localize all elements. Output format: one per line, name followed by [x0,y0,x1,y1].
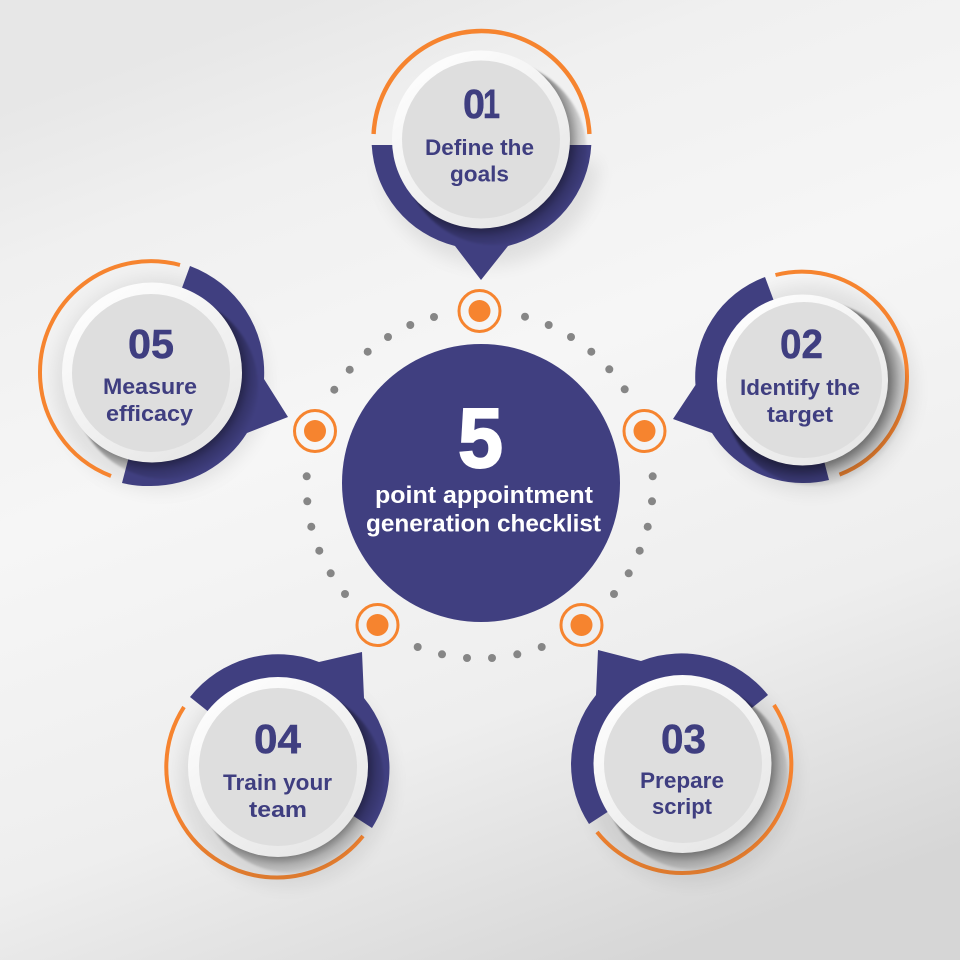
label [223,770,332,822]
label: team [249,797,307,822]
soft shadow [74,295,258,479]
navy pointer [571,650,768,824]
number: 02 [780,321,823,367]
dotted ring [303,313,657,662]
label [103,374,197,426]
number: 0 [463,81,485,127]
number: 1 [483,81,500,127]
label: Measure [103,374,197,399]
centre title [366,482,601,538]
inner grey circle [199,688,357,846]
label: Define the [425,135,534,160]
label [425,135,534,186]
soft shadow [200,689,384,873]
navy pointer [673,277,829,483]
number: 04 [254,716,301,762]
orange arc [374,31,589,134]
outer soft shadow [380,162,599,265]
label: Train your [223,770,332,795]
outer soft shadow [180,673,392,885]
node 01: define the goals [372,31,599,280]
label: goals [450,162,509,186]
centre number: 5 [458,391,503,485]
number [463,81,500,127]
marker 04 [357,604,398,646]
centre circle [342,344,620,622]
label: efficacy [106,401,193,426]
label: script [652,794,712,819]
marker 03 [561,604,602,646]
soft shadow [604,686,788,870]
orange arc [166,707,363,878]
centre title: generation checklist [366,510,601,538]
soft shadow [403,61,587,245]
node 04: train your team [166,652,392,885]
marker 01 [459,290,500,332]
marker 02 [624,410,665,452]
node 03: prepare script [571,650,796,882]
navy pointer [122,266,288,486]
label: target [767,402,834,427]
label [740,375,860,427]
label: Prepare [640,768,724,793]
node 02: identify the target [673,272,914,492]
outer soft shadow [584,670,796,882]
navy pointer [372,145,591,280]
number: 05 [128,321,174,367]
orange arc [597,705,791,873]
node 05: measure efficacy [40,261,288,490]
inner grey circle [604,685,762,843]
inner grey circle [726,302,882,458]
disc [392,50,570,228]
navy pointer [190,652,390,828]
centre title: point appointment [375,482,593,509]
outer soft shadow [54,278,266,490]
orange arc [40,261,180,476]
soft shadow [724,302,908,486]
outer soft shadow [706,284,914,492]
label [640,768,724,819]
disc [717,294,888,466]
disc [188,677,368,857]
marker 05 [294,410,336,452]
inner grey circle [72,294,230,452]
orange arc [776,272,907,475]
inner grey circle [402,60,560,218]
label: Identify the [740,375,860,400]
number: 03 [661,716,706,762]
disc [594,675,772,853]
disc [62,282,242,462]
